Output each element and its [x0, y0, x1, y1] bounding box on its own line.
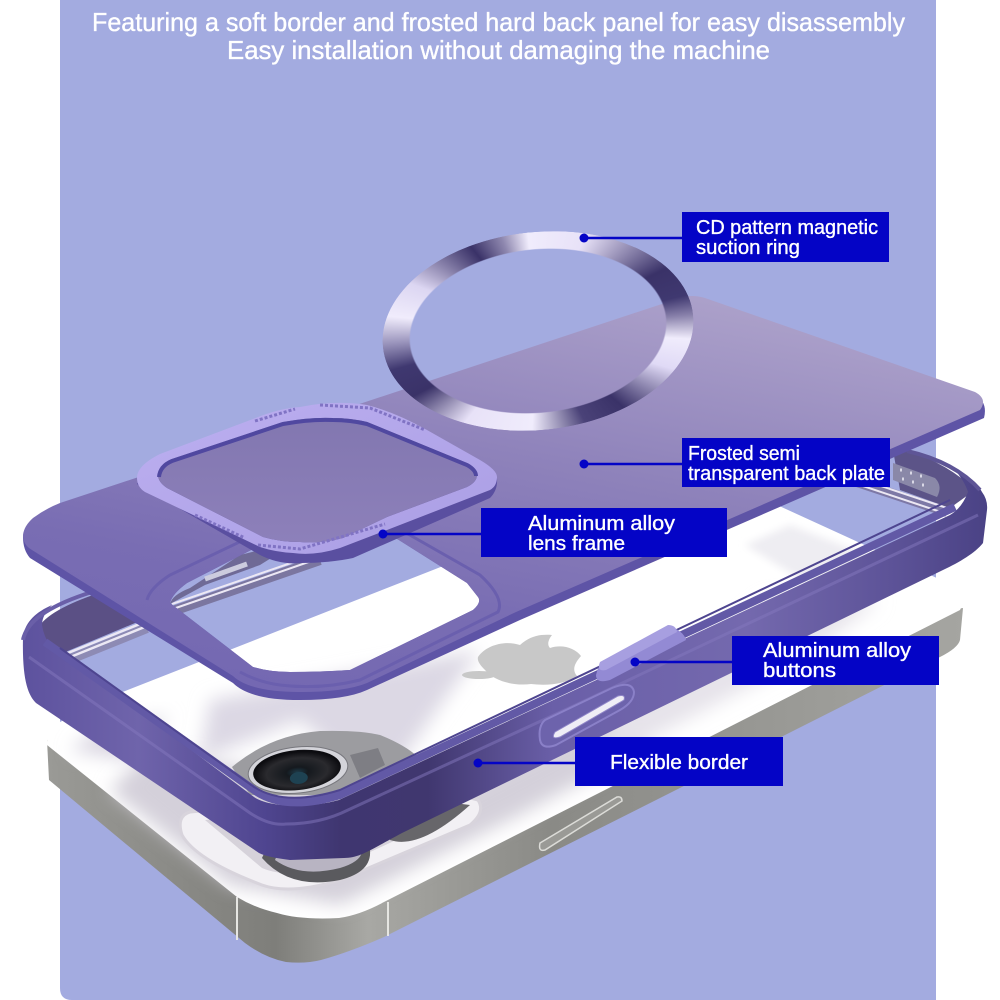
lens frame [137, 403, 497, 563]
lower lenses [262, 840, 370, 882]
callout: frosted back plate [580, 438, 890, 487]
callout: CD pattern magnetic suction ring: CD pattern magnetic [696, 217, 878, 239]
frame far walls [37, 566, 180, 653]
apple logo [462, 635, 581, 685]
callout: flexible border [474, 737, 783, 786]
phone camera slot [540, 685, 634, 747]
flexible border frame [23, 450, 987, 860]
engraved edge marks [195, 405, 425, 549]
phone body [47, 467, 964, 963]
title: Featuring a soft border and frosted hard back panel for easy disassembly [92, 7, 905, 37]
camera bump [232, 731, 418, 795]
callout: lens frame: Aluminum alloy [528, 513, 675, 535]
callout: lens frame: lens frame [528, 533, 625, 555]
callout: CD pattern magnetic suction ring: suction ring [696, 237, 800, 259]
frame highlights [23, 451, 980, 824]
callout: aluminum buttons: buttons [763, 660, 836, 682]
callout: aluminum buttons [630, 636, 939, 685]
callout: aluminum buttons: Aluminum alloy [763, 640, 911, 662]
side button [540, 797, 622, 850]
dotted grip pad [893, 463, 940, 497]
phone side: silver edge [47, 608, 963, 963]
callout: flexible border: Flexible border [610, 752, 748, 774]
phone back: white glass [47, 467, 964, 918]
callout: frosted back plate: transparent back plate [688, 463, 885, 485]
title: Easy installation without damaging the machine [227, 35, 770, 65]
lower camera rim [180, 790, 481, 889]
aluminum buttons [596, 625, 686, 681]
callout: frosted back plate: Frosted semi [688, 443, 800, 465]
frame band [23, 470, 987, 860]
magnetic suction ring [382, 231, 694, 431]
title [92, 7, 905, 65]
frame far rails [63, 478, 947, 662]
frosted back plate [23, 296, 985, 700]
main lens [246, 742, 350, 798]
callout: lens frame [378, 508, 727, 557]
callout: CD pattern magnetic suction ring [580, 212, 889, 262]
plate recess outline [147, 515, 500, 687]
